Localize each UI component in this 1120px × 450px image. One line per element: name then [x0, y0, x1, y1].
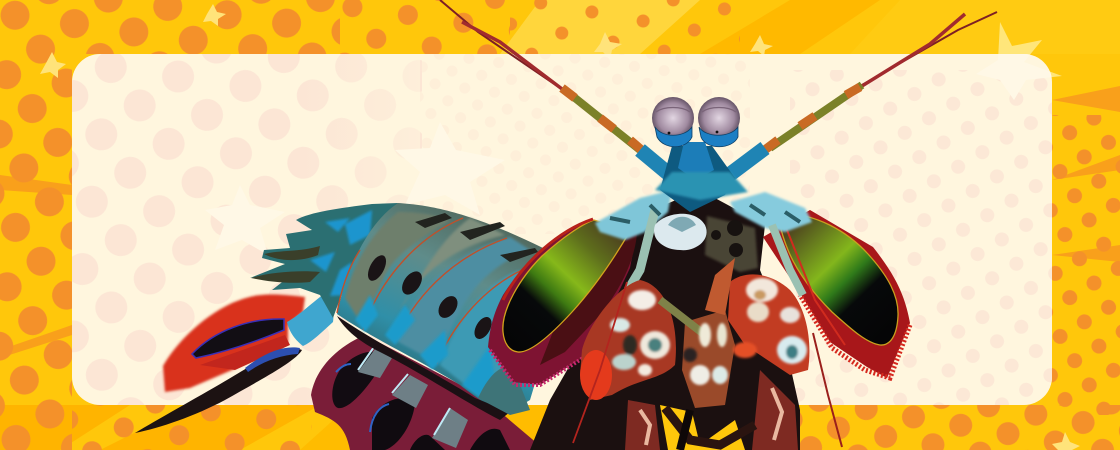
telson spikes	[250, 203, 398, 318]
antenna: left	[440, 0, 682, 185]
thin red feelers	[573, 282, 842, 447]
abdomen segments	[337, 203, 560, 420]
mouthparts white blob	[654, 214, 707, 250]
antenna: right	[725, 12, 997, 178]
head and stalks	[655, 142, 748, 212]
pleopods	[311, 335, 545, 450]
mantis shrimp	[135, 0, 997, 450]
raptorial appendage: left wing	[488, 219, 637, 385]
mottled claws	[580, 258, 809, 408]
tail fan	[135, 295, 333, 433]
raptorial appendage: right wing	[763, 210, 910, 378]
central dark carapace and lower legs	[530, 190, 800, 450]
eyes	[652, 97, 740, 147]
arms	[595, 190, 812, 295]
panel: cream rounded card	[72, 22, 1062, 405]
